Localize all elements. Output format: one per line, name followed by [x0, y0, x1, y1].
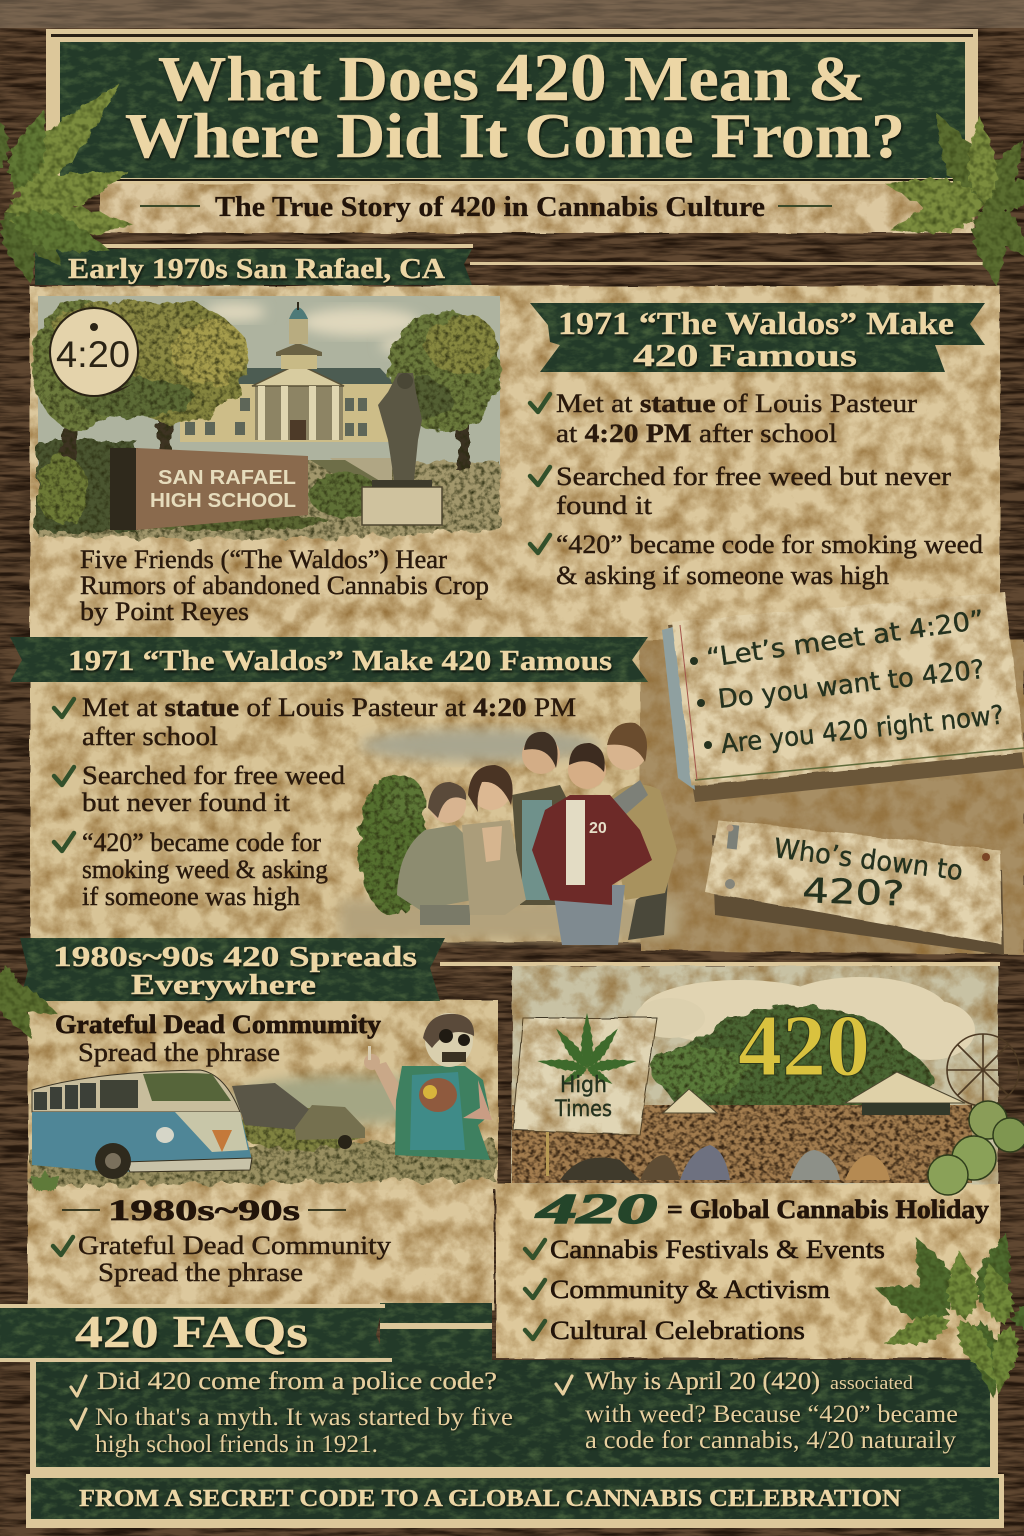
junk car [232, 1083, 365, 1149]
lawn left [36, 440, 136, 532]
illustration: five friends [358, 723, 677, 945]
statue [362, 373, 442, 525]
mottled backdrop behind notes [640, 640, 1024, 955]
leaf cluster: top left [0, 69, 135, 289]
checklist: waldos right: at 4:20 PM after school [556, 419, 837, 448]
tree hill [650, 1005, 935, 1115]
faq left column: No that's a myth. It was started by five [95, 1404, 513, 1431]
note: phrases [662, 592, 1024, 802]
panel: global holiday: Cultural Celebrations [550, 1316, 805, 1345]
checklist: waldos left: after school [82, 722, 218, 751]
footer banner: FROM A SECRET CODE TO A GLOBAL CANNABIS CELEBRATION [79, 1486, 902, 1512]
checklist: waldos left: Searched for free weed [82, 761, 345, 790]
faq left column: Did 420 come from a police code? [97, 1368, 497, 1395]
hills [230, 1076, 470, 1124]
checklist: waldos left: smoking weed & asking [82, 855, 328, 884]
ribbon: 420 FAQs [0, 1303, 492, 1363]
checklist: waldos left: Met at statue of Louis Pasteur at 4:20 PM [82, 693, 576, 722]
panel: global holiday: = Global Cannabis Holiday [667, 1195, 989, 1224]
panel: festival illustration [512, 966, 1019, 1184]
caption: five friends: Five Friends (“The Waldos”) Hear [80, 545, 447, 574]
ribbon: 1980s-90s: 1980s~90s 420 Spreads [53, 941, 417, 973]
panel: global holiday: Community & Activism [550, 1275, 830, 1304]
right tree [388, 312, 501, 470]
clock badge: 4:20 [56, 334, 130, 375]
ribbon: 1980s-90s: Everywhere [131, 969, 316, 1001]
faq left column [71, 1368, 513, 1458]
ribbon: 1971 waldos right [530, 303, 985, 373]
sky wash behind the friends [340, 729, 680, 940]
green fruits [928, 1101, 1024, 1195]
faq right column: a code for cannabis, 4/20 naturaily [585, 1427, 957, 1454]
checklist: waldos right: Searched for free weed but never [556, 462, 951, 491]
caption: five friends: by Point Reyes [80, 597, 249, 626]
skeleton figure [364, 1013, 492, 1160]
caption: five friends [80, 545, 489, 626]
clouds [635, 977, 975, 1060]
faq right column: associated [830, 1373, 914, 1394]
ferris wheel [947, 1034, 1019, 1106]
bushes [36, 456, 88, 524]
checklist: waldos left [54, 693, 576, 911]
checklist: waldos right: “420” became code for smoking weed [556, 530, 983, 559]
checklist: waldos left: but never found it [82, 788, 291, 817]
ribbon: early 1970s: Early 1970s San Rafael, CA [68, 253, 445, 285]
panel: global holiday: Cannabis Festivals & Events [550, 1235, 885, 1264]
note: phrases: Do you want to 420? [716, 655, 986, 715]
brush [240, 1110, 360, 1150]
checklist: waldos right: Met at statue of Louis Pasteur [556, 389, 917, 418]
panel: Grateful Dead lower: Spread the phrase [98, 1258, 303, 1287]
high times sign: High [560, 1073, 607, 1098]
person 4 maroon jacket: 20 [589, 820, 607, 837]
panel: Grateful Dead lower: 1980s~90s [108, 1194, 300, 1227]
crowd [512, 1105, 972, 1183]
clock badge [50, 308, 138, 396]
school sign [110, 448, 308, 530]
title banner [46, 29, 978, 186]
left tree [32, 300, 248, 465]
big 420: 420 [738, 998, 870, 1095]
faq right column: with weed? Because “420” became [585, 1401, 958, 1428]
high times sign: Times [554, 1097, 612, 1122]
subtitle strip [100, 184, 975, 233]
checklist: waldos left: if someone was high [82, 882, 300, 911]
heading: Grateful Dead community: Grateful Dead Commumity [55, 1010, 381, 1039]
school sign: SAN RAFAEL [158, 467, 296, 489]
panel: global holiday: 420 [535, 1187, 657, 1233]
panel: FAQ [30, 1360, 998, 1477]
ground [30, 1140, 495, 1186]
person 2 [462, 765, 526, 915]
title text: Where Did It Come From? [125, 101, 905, 171]
note: who's down to 420: Who’s down to [772, 833, 965, 887]
section: paper Waldos [30, 642, 680, 942]
panel: Grateful Dead lower: Grateful Dead Community [78, 1231, 391, 1260]
high times sign [513, 1013, 657, 1176]
person 4 maroon jacket [532, 743, 652, 945]
ribbon: 1971 waldos left: 1971 “The Waldos” Make 420 Famous [68, 645, 612, 677]
illustration: Grateful Dead scene [30, 1013, 495, 1186]
heading: Grateful Dead community [55, 1010, 381, 1067]
faq left column: high school friends in 1921. [95, 1431, 378, 1458]
ribbon: 1980s-90s [20, 938, 1000, 1001]
caption: five friends: Rumors of abandoned Cannabis Crop [80, 571, 489, 600]
ribbon: 1971 waldos right: 1971 “The Waldos” Make [558, 305, 954, 341]
bush [358, 775, 426, 915]
panel: Grateful Dead lower [28, 1190, 494, 1310]
checklist: waldos left: “420” became code for [82, 828, 321, 857]
faq right column [556, 1368, 958, 1454]
ribbon: 420 FAQs: 420 FAQs [75, 1307, 308, 1357]
leaf cluster: top right [881, 103, 1024, 289]
subtitle strip: The True Story of 420 in Cannabis Culture [215, 191, 765, 223]
building [180, 302, 395, 442]
leaf cluster: lower left [0, 962, 64, 1047]
ribbon: 1971 waldos right: 420 Famous [633, 337, 857, 373]
checklist: waldos right [530, 389, 983, 590]
title text [125, 39, 905, 171]
note: who's down to 420: 420? [802, 871, 905, 915]
title text: What Does 420 Mean & [158, 39, 865, 115]
person 5 [607, 723, 677, 940]
panel: global holiday [496, 1184, 1000, 1358]
section: paper San Rafael [30, 286, 1000, 642]
VW bus [32, 1070, 252, 1179]
note: phrases: Are you 420 right now? [720, 700, 1005, 760]
leaf sprig: small [26, 1170, 64, 1195]
note: phrases: “Let’s meet at 4:20” [705, 605, 986, 674]
ribbon: 1971 waldos left [10, 637, 648, 682]
note: who's down to 420 [705, 820, 1004, 955]
tents [663, 1089, 717, 1113]
sky [38, 296, 500, 466]
illustration: San Rafael High School [32, 296, 501, 539]
checklist: waldos right: & asking if someone was high [556, 561, 889, 590]
section: paper Grateful Dead [28, 1000, 498, 1190]
footer banner [26, 1474, 1004, 1528]
heading: Grateful Dead community: Spread the phrase [78, 1038, 280, 1067]
person 3 [512, 732, 575, 905]
crowd foreground [560, 1145, 890, 1180]
school sign: HIGH SCHOOL [150, 490, 296, 512]
leaf cluster: bottom right [869, 1228, 1024, 1401]
checklist: waldos right: found it [556, 491, 653, 520]
faq right column: Why is April 20 (420) [585, 1368, 820, 1395]
stairs [330, 458, 392, 484]
ground [36, 462, 500, 539]
person 1 [397, 782, 472, 925]
ribbon: early 1970s [35, 244, 1000, 285]
